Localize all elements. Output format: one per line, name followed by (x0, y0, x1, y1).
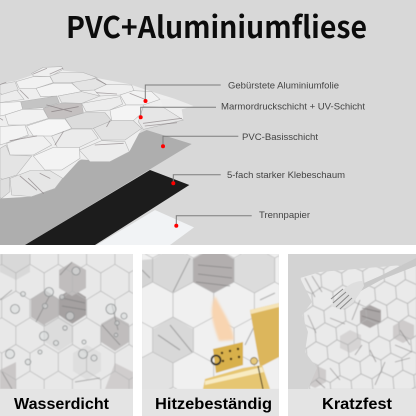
white page strip (0, 245, 416, 416)
callout: Marmordruckschicht: Marmordruckschicht + UV-Schicht (221, 102, 365, 112)
callout: PVC-Basisschicht (161, 132, 318, 148)
callout: Gebürstete Aluminiumfolie: Gebürstete Aluminiumfolie (228, 80, 339, 90)
top grey background (0, 0, 416, 245)
label band (288, 254, 416, 416)
label band (0, 254, 133, 416)
layer: grey PVC base (0, 130, 192, 245)
callout: Klebeschaum: 5-fach starker Klebeschaum (227, 170, 345, 180)
label: Kratzfest (322, 396, 392, 413)
title: PVC+Aluminiumfliese (66, 3, 367, 47)
panel: Hitzebeständig (142, 247, 279, 416)
callout: Trennpapier (174, 210, 310, 228)
layer: white release paper (97, 210, 194, 245)
marble hex wall with water drops (0, 254, 133, 389)
label: Hitzebeständig (155, 396, 272, 413)
panel: Wasserdicht (0, 254, 133, 416)
label band (142, 254, 279, 416)
icon: silver fork (331, 258, 416, 310)
panel: Kratzfest (288, 254, 416, 416)
layer: marble hexagon sheet (0, 67, 193, 198)
callout: Klebeschaum (171, 170, 345, 185)
marble hex wall (142, 247, 279, 389)
grey photo background (288, 254, 416, 389)
icon: gold lighter (203, 303, 279, 389)
layer: black adhesive foam (25, 170, 189, 245)
callout: Gebürstete Aluminiumfolie (144, 80, 339, 103)
marble veining (0, 68, 182, 193)
icon: flame (212, 296, 234, 341)
tilted marble hex sheet (300, 266, 416, 389)
callout: PVC-Basisschicht: PVC-Basisschicht (242, 132, 318, 142)
callout: Trennpapier: Trennpapier (259, 210, 310, 220)
layer diagram (0, 67, 194, 245)
water drops (6, 267, 127, 365)
callout: Marmordruckschicht (139, 102, 365, 119)
label: Wasserdicht (14, 396, 109, 413)
